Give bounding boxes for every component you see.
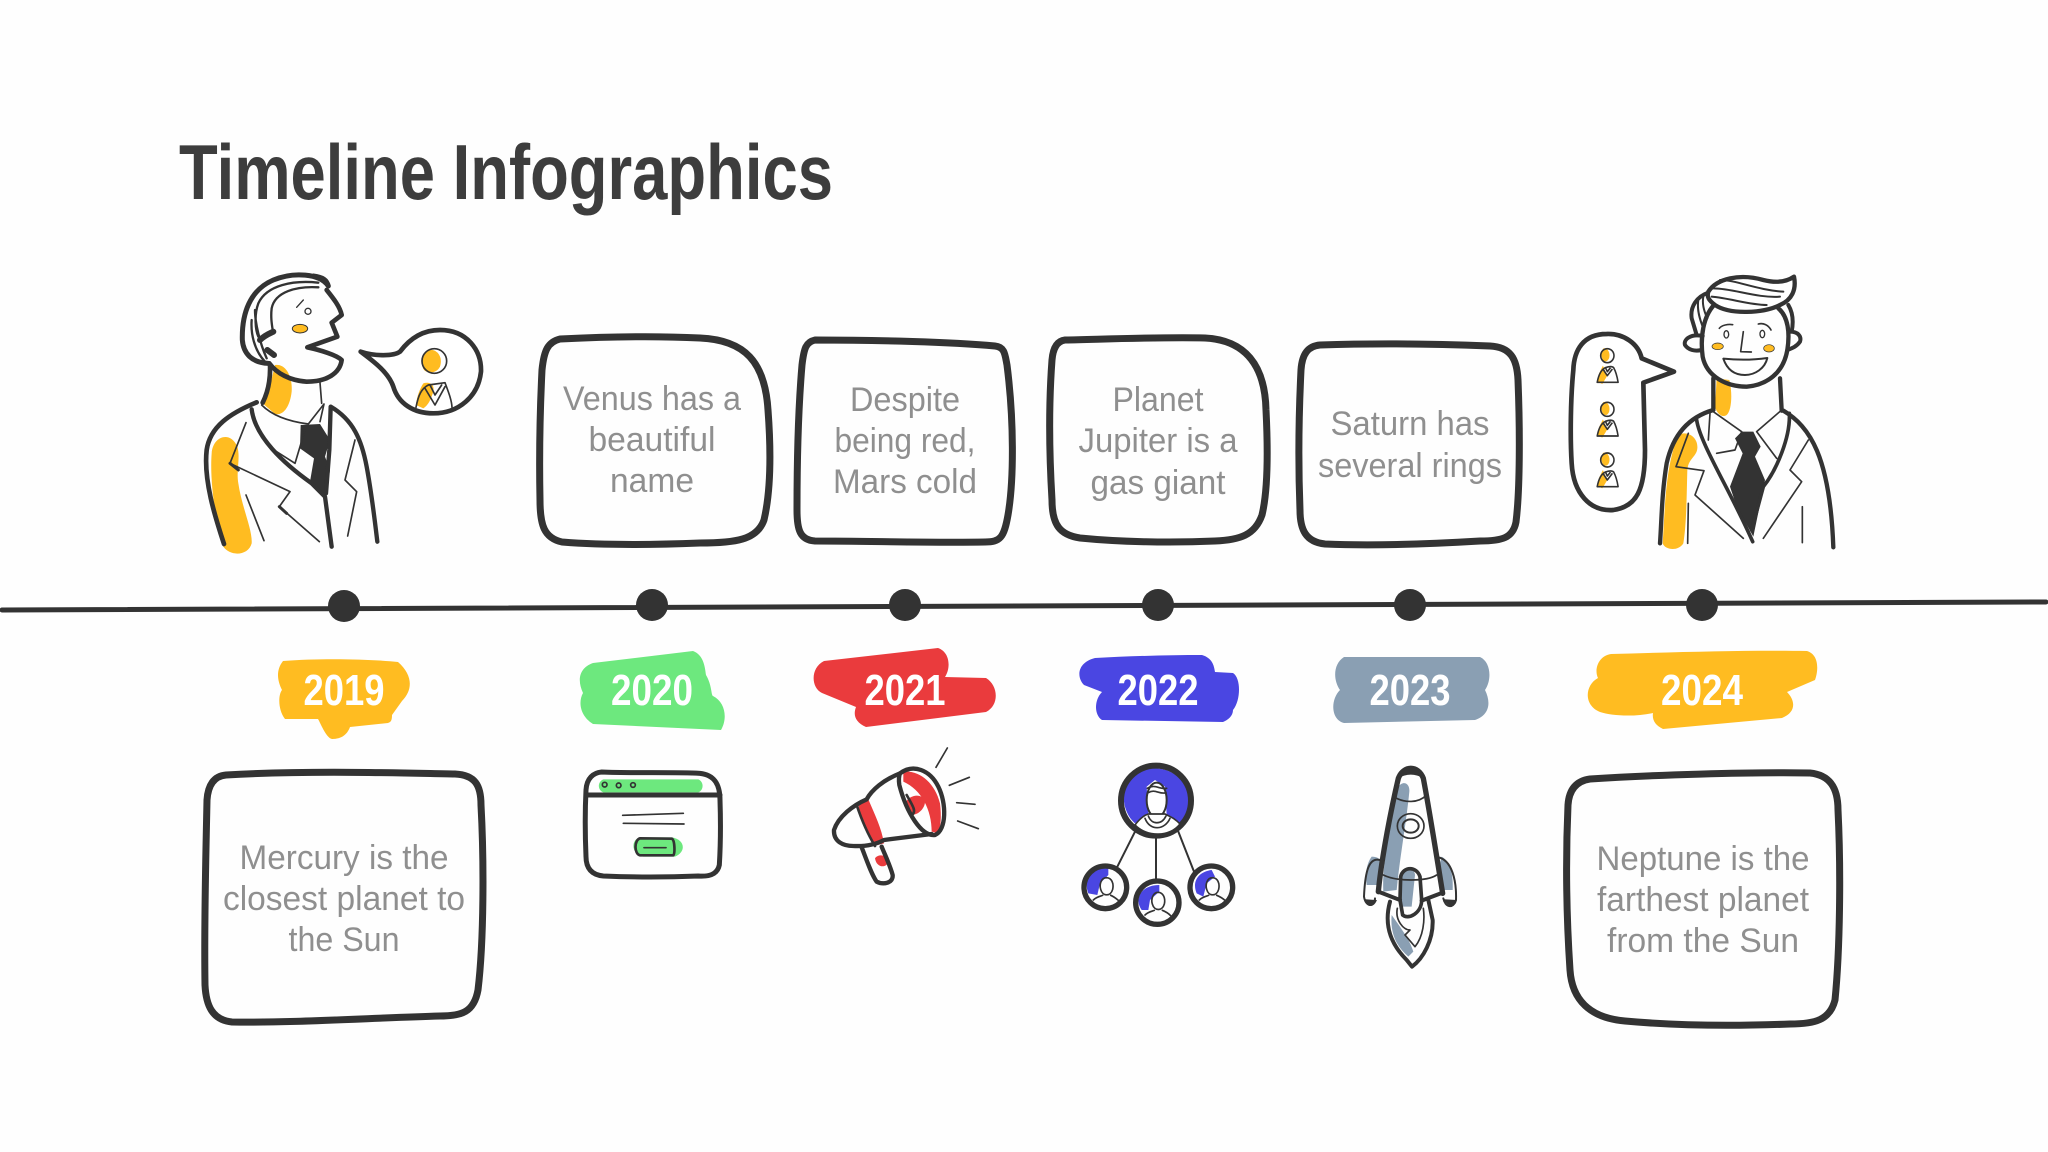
icon: rocket — [1364, 767, 1456, 967]
year label: 2021: 2021 — [864, 666, 946, 715]
year label: 2022 — [1079, 655, 1239, 722]
panel: 2020 Venus — [540, 337, 770, 544]
text: Saturn description: several rings — [1318, 447, 1502, 485]
year label: 2023: 2023 — [1370, 666, 1450, 715]
icon: team network — [1084, 766, 1233, 924]
text: Mars description: Despite — [850, 381, 960, 419]
icon: browser window — [585, 772, 720, 877]
text: Neptune description — [1596, 840, 1810, 960]
text: Mars description: being red, — [834, 422, 976, 460]
text: Neptune description: farthest planet — [1597, 881, 1810, 919]
text: Neptune description: Neptune is the — [1596, 840, 1810, 878]
title: Timeline Infographics — [179, 128, 833, 216]
text: Venus description: beautiful — [588, 421, 716, 459]
panel: 2024 Neptune — [1567, 773, 1840, 1025]
year label: 2020: 2020 — [611, 666, 693, 715]
panel: 2023 Saturn — [1299, 344, 1519, 545]
text: Jupiter description — [1078, 381, 1238, 502]
panel: 2019 Mercury — [205, 772, 483, 1022]
year label: 2024 — [1588, 651, 1817, 729]
figure: left man speaking — [206, 275, 481, 554]
year label: 2021 — [814, 648, 996, 727]
year label: 2022: 2022 — [1118, 666, 1198, 715]
icon: megaphone — [834, 748, 978, 883]
year label: 2019 — [278, 659, 410, 739]
text: Jupiter description: Planet — [1112, 381, 1204, 419]
year label: 2024: 2024 — [1661, 666, 1743, 715]
text: Mercury description: Mercury is the — [240, 839, 448, 877]
text: Mercury description — [223, 839, 465, 959]
year label: 2019: 2019 — [304, 666, 384, 715]
text: Venus description: Venus has a — [563, 380, 741, 418]
figure: right man smiling — [1571, 277, 1833, 549]
text: Jupiter description: gas giant — [1090, 464, 1226, 502]
panel: 2021 Mars — [797, 340, 1012, 542]
text: Saturn description: Saturn has — [1330, 405, 1490, 443]
year label: 2023 — [1333, 657, 1489, 723]
text: Mercury description: the Sun — [288, 921, 400, 959]
text: Neptune description: from the Sun — [1607, 922, 1799, 960]
year label: 2020 — [580, 651, 725, 730]
text: Mars description: Mars cold — [833, 463, 977, 501]
text: Jupiter description: Jupiter is a — [1078, 422, 1238, 460]
timeline axis — [2, 589, 2046, 622]
panel: 2022 Jupiter — [1050, 338, 1267, 542]
text: Saturn description — [1318, 405, 1502, 485]
text: Mars description — [833, 381, 977, 501]
text: Mercury description: closest planet to — [223, 880, 465, 918]
text: Venus description — [563, 380, 741, 500]
text: Venus description: name — [610, 462, 694, 500]
